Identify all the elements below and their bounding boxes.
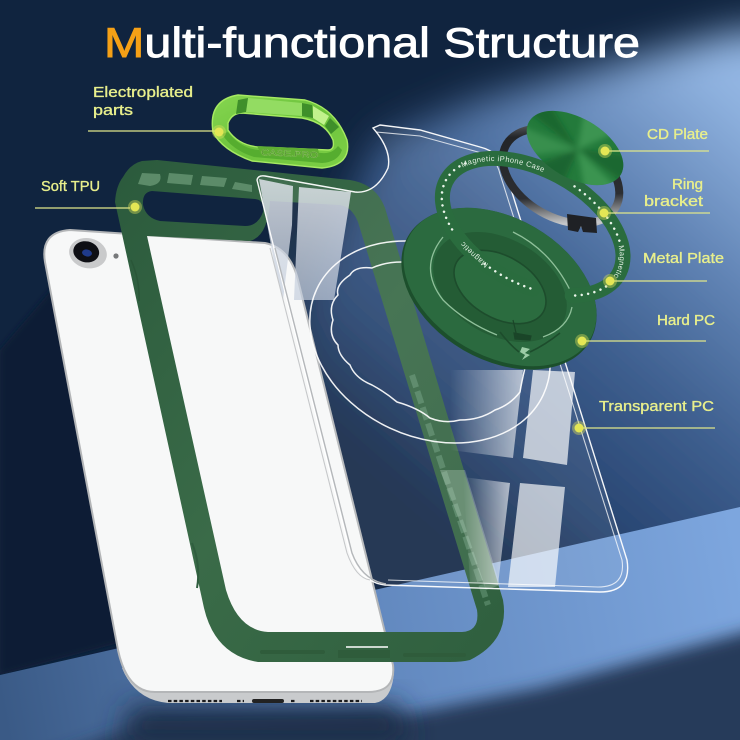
label: metal plate: Metal Plate: [643, 251, 724, 267]
port cutout: [338, 650, 390, 658]
ring text right: Magnetic: [614, 246, 625, 278]
label: electroplated parts: Electroplated: [93, 85, 193, 101]
ring text top: Magnetic iPhone Case: [461, 156, 544, 172]
label: transparent PC: Transparent PC: [599, 399, 714, 415]
label: metal plate: [603, 251, 724, 288]
camera lens: [66, 235, 110, 272]
electroplated parts lime ring: [212, 95, 348, 168]
label: soft TPU: Soft TPU: [41, 179, 100, 195]
hinge slot: [513, 320, 531, 340]
label: CD plate: CD Plate: [647, 127, 708, 143]
bracket hinge: [567, 214, 597, 233]
flash: [113, 253, 119, 259]
label: CD plate: [598, 127, 709, 158]
charging port: [252, 699, 284, 703]
frame corner pads: [138, 173, 252, 192]
label: electroplated parts: parts: [93, 103, 133, 119]
label: hard PC: Hard PC: [657, 313, 715, 329]
logo text on ring: CASE.PRO: [261, 147, 319, 160]
CD plate: [526, 110, 624, 186]
ring bevel highlights: [246, 98, 302, 116]
glare panels: [259, 179, 293, 300]
outlines: [257, 125, 628, 592]
speaker holes and port: [168, 700, 362, 702]
label: ring bracket: Ring: [672, 177, 703, 193]
disc light ring arcs: [430, 232, 572, 337]
kickstand notch: [500, 332, 560, 352]
ring bracket: [486, 109, 636, 243]
bottom cutouts: [262, 652, 464, 655]
right bar vents: [412, 375, 488, 605]
transparent PC shell: [257, 125, 628, 592]
soft TPU green frame: [115, 160, 504, 662]
metal plate ring: [434, 150, 631, 300]
disc recess: [414, 209, 586, 365]
label: hard PC: [575, 313, 715, 348]
label: ring bracket: [597, 177, 710, 220]
lightning logo: [520, 347, 530, 360]
side button bottom: [192, 543, 198, 588]
title: Multi-functional Structure: [104, 19, 640, 66]
label: soft TPU: [35, 179, 142, 214]
label: electroplated parts: [88, 85, 226, 139]
magnetic circle outline: [277, 203, 583, 481]
ring text left: Magnetic: [462, 242, 488, 268]
wavy inner line: [331, 262, 525, 422]
phone body: [44, 230, 394, 703]
logo plate: [257, 146, 320, 157]
ring dots: [419, 131, 643, 323]
label: ring bracket: bracket: [644, 194, 703, 210]
hard PC green disc: [373, 175, 625, 403]
disc centre pad: [441, 235, 559, 339]
label: transparent PC: [572, 399, 715, 435]
side button top: [131, 260, 139, 301]
